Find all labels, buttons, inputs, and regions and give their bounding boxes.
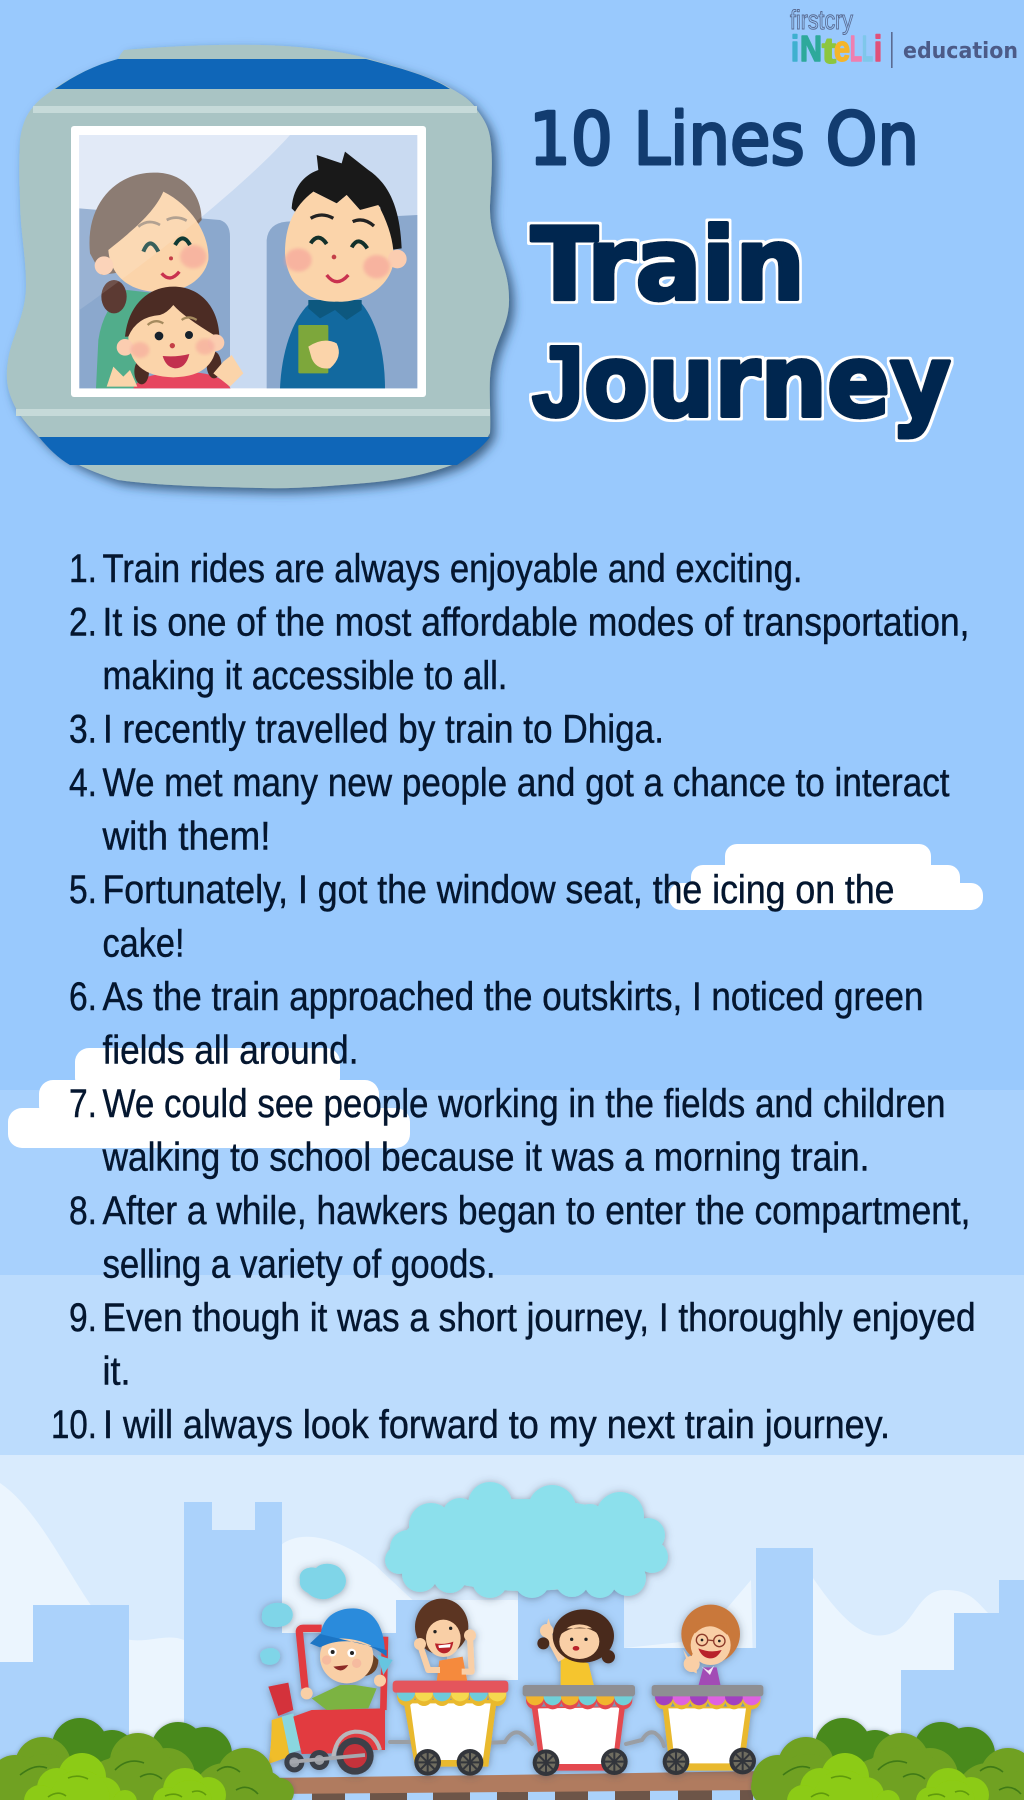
list item 2: 2. (69, 600, 97, 644)
driver boy (301, 1608, 393, 1710)
window scene (79, 135, 417, 388)
wooden track (266, 1771, 766, 1800)
steam cloud large (385, 1482, 668, 1598)
locomotive wheels (284, 1737, 374, 1775)
list item 7 (69, 1082, 946, 1180)
passenger: child (107, 287, 243, 388)
logo: separator (891, 32, 893, 68)
left bush (0, 1718, 294, 1800)
list item 1: Train rides are always enjoyable and exciting. (102, 547, 802, 591)
list item 7: 7. (69, 1082, 97, 1126)
locomotive with driver (268, 1608, 393, 1775)
logo: intelli coloured letters: t (822, 30, 836, 71)
list item 5: 5. (69, 868, 97, 912)
cart 1 with girl (393, 1599, 508, 1776)
list item 8: selling a variety of goods. (102, 1242, 496, 1286)
illustration: family in train window (7, 45, 509, 488)
white cloud near item 5 (669, 844, 983, 910)
right bush (751, 1718, 1024, 1800)
title line: Train: Train (531, 206, 805, 323)
window frame (71, 126, 426, 397)
track plank (266, 1771, 766, 1794)
list item 3: I recently travelled by train to Dhiga. (103, 708, 664, 752)
logo: intelli coloured letters: L (862, 28, 873, 69)
upper blue stripe (55, 59, 450, 89)
list item 8 (69, 1189, 970, 1286)
steam puffs (260, 1564, 346, 1665)
title line: Journey: Journey (532, 323, 951, 440)
logo (790, 5, 1018, 71)
list item 10: I will always look forward to my next train journey. (103, 1403, 890, 1447)
list item 6: As the train approached the outskirts, I noticed green (102, 975, 924, 1019)
landscape: hills and city buildings (0, 1483, 1024, 1800)
train body blob (7, 45, 509, 488)
passenger: mother (89, 173, 208, 388)
list item 5 (69, 868, 894, 966)
list item 3: 3. (69, 708, 97, 752)
list item 5: Fortunately, I got the window seat, the icing on the (102, 868, 894, 912)
list item 9: it. (102, 1350, 130, 1394)
cart 3 with girl (652, 1605, 763, 1775)
pale stripes (16, 106, 490, 416)
title (529, 97, 951, 440)
track posts (280, 1790, 753, 1800)
numbered list (51, 547, 976, 1447)
passenger: father (280, 152, 407, 388)
list item 5: cake! (102, 922, 184, 966)
list item 9 (69, 1296, 976, 1394)
lower blue stripe (39, 437, 490, 465)
list item 4 (69, 761, 950, 858)
logo: intelli coloured letters: L (850, 28, 862, 69)
list item 2 (69, 600, 970, 698)
list item 8: 8. (69, 1189, 97, 1233)
list item 6 (69, 975, 924, 1072)
list item 4: 4. (69, 761, 97, 805)
logo: intelli coloured letters (791, 28, 882, 71)
logo: education word: education (903, 39, 1018, 64)
white cloud near item 7 (8, 1048, 410, 1148)
list item 6: 6. (69, 975, 97, 1019)
toy train with children (268, 1599, 763, 1776)
list item 2: making it accessible to all. (102, 654, 508, 698)
list item 6: fields all around. (102, 1028, 358, 1072)
logo: firstcry wordmark: firstcry (790, 5, 853, 35)
cart 2 with girl (523, 1609, 635, 1776)
logo: intelli coloured letters: e (834, 28, 850, 69)
logo: intelli coloured letters: i (874, 28, 882, 69)
list item 9: 9. (69, 1296, 97, 1340)
list item 4: with them! (102, 814, 271, 858)
title line: 10 Lines On: 10 Lines On (529, 97, 919, 181)
list item 1: 1. (69, 547, 97, 591)
glass reflection (79, 135, 290, 310)
couplers (390, 1732, 664, 1746)
logo: intelli coloured letters: N (800, 28, 822, 69)
list item 7: walking to school because it was a morning train. (102, 1136, 870, 1180)
seats (79, 208, 417, 388)
list item 10: 10. (51, 1403, 97, 1447)
logo: intelli coloured letters: i (791, 28, 799, 69)
